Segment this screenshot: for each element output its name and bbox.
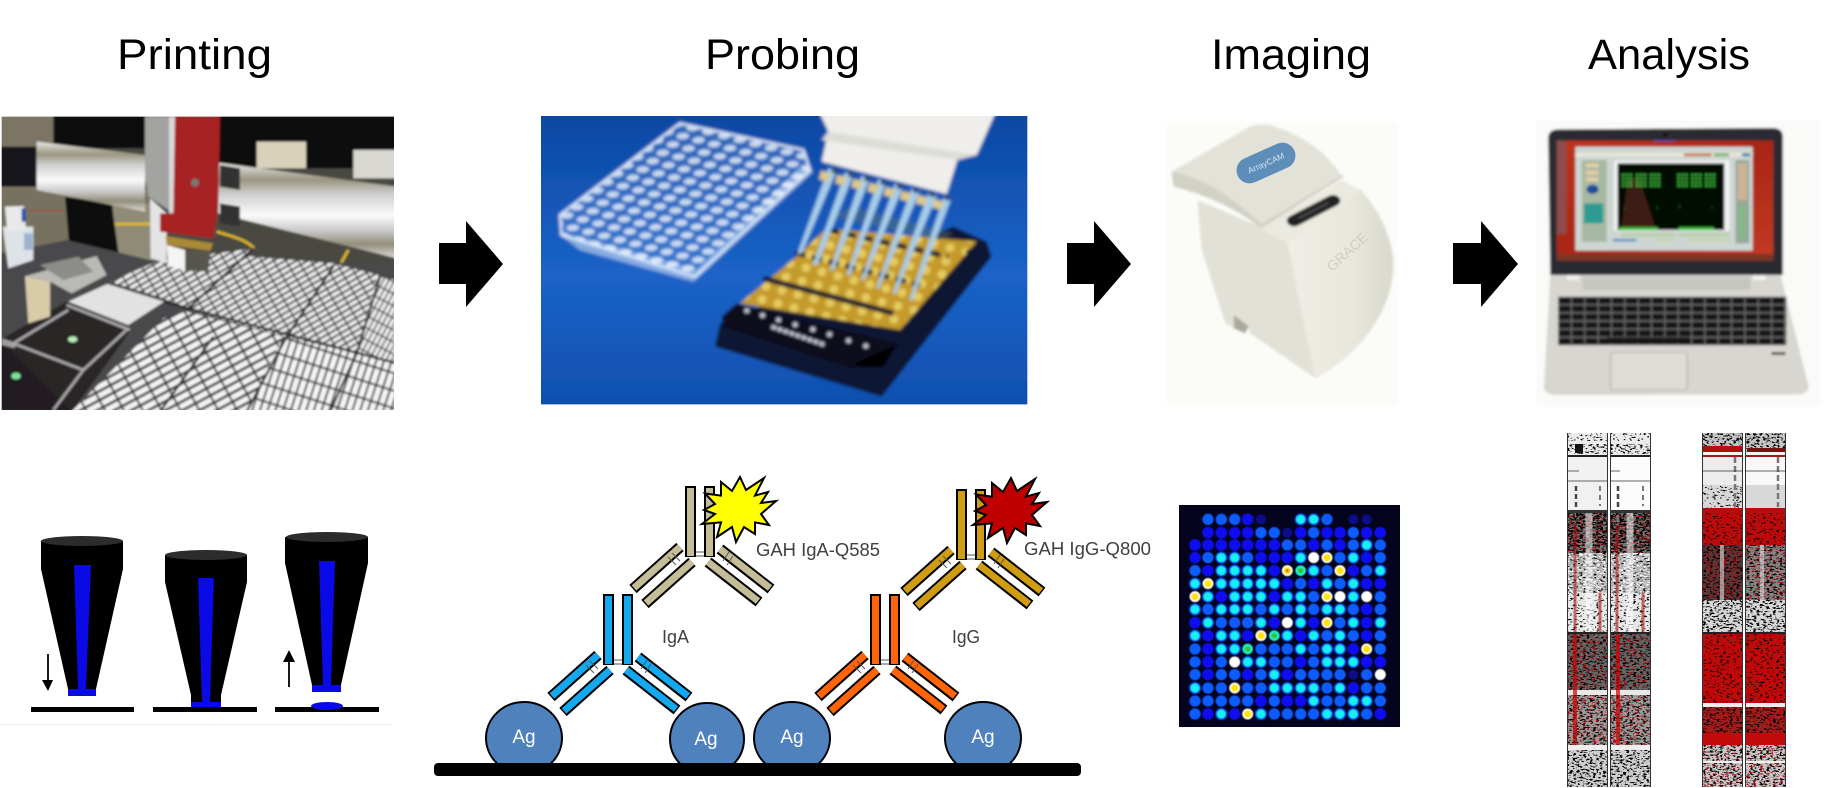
title: Probing: Probing [705,31,860,79]
arrow: probing to imaging [1067,221,1131,307]
faint divider under spotting diagram [0,724,393,725]
GAH IgG secondary antibody [904,489,1042,607]
GAH IgA secondary antibody [633,486,771,604]
title: Imaging: Imaging [1211,31,1371,79]
arrow: printing to probing [439,221,503,307]
GRACE logo on imager: GRACE [1323,229,1371,274]
pin 1 descending [31,536,134,712]
heatmap column separator and frame [1568,433,1650,787]
pin 3 lifting with droplet [275,532,379,712]
yellow fluorophore burst [702,477,776,542]
imager photo artwork [1167,122,1398,407]
IgA primary antibody [551,594,689,712]
diagram: antibody sandwich assay [434,477,1151,776]
antigen labels: Ag [694,729,718,750]
heatmap: IgG [1702,433,1786,787]
photo: laptop running analysis software [1536,120,1820,407]
label: GAH IgG-Q800: GAH IgG-Q800 [1024,539,1151,559]
title: Analysis: Analysis [1588,31,1750,79]
arrow: imaging to analysis [1453,221,1518,307]
diagram: pin spotting sequence [0,532,393,725]
antigen labels [512,727,995,750]
label: IgA: IgA [662,627,689,647]
label: GAH IgA-Q585: GAH IgA-Q585 [756,540,880,560]
photo: printing robot [0,115,397,412]
heatmap bands [1702,433,1786,787]
ArrayCAM label plate [1232,139,1300,187]
heatmap bands [1567,433,1651,787]
spot grid [1195,519,1380,714]
heatmap column separator and frame [1702,433,1786,787]
heatmap: IgA [1567,433,1651,787]
antigen labels: Ag [512,727,536,748]
support surface bar [434,763,1081,776]
microarray fluorescence image [1179,505,1400,727]
label: IgG: IgG [952,627,980,647]
antigen labels: Ag [971,727,995,748]
title: Printing: Printing [117,31,272,79]
photo: multichannel pipette and slide holder [533,110,1033,410]
red fluorophore burst [973,478,1047,543]
antigen spots [486,702,1021,775]
pin 2 contact [153,550,257,712]
IgG primary antibody [818,594,956,712]
photo: ArrayCAM imager [1167,122,1398,407]
ArrayCAM label plate: ArrayCAM [1246,150,1286,176]
antigen labels: Ag [780,727,804,748]
